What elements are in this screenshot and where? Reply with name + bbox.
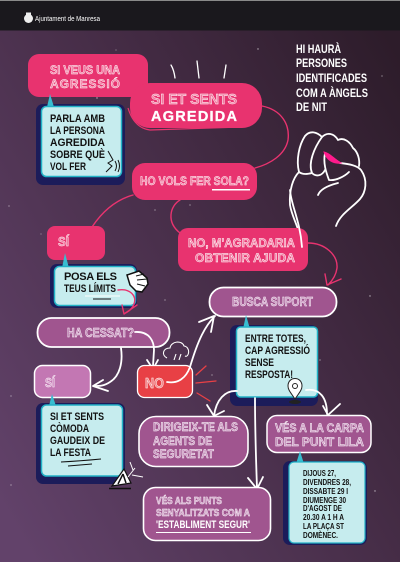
arrow: to dirigeix (207, 391, 237, 416)
arrow: no to busca suport (308, 243, 341, 285)
callout: dates punt lila: 20.30 A 1 H A (303, 513, 344, 522)
callout: parla amb la persona agredida: PARLA AMB (50, 113, 105, 125)
decorative rays around title (171, 61, 226, 78)
panel: ves als punts (144, 488, 270, 540)
text block: angels de nit: HI HAURÀ (296, 43, 341, 56)
panel: title si et sents agredida: AGREDIDA (151, 109, 238, 125)
callout: dates punt lila: DOMÈNEC. (303, 531, 338, 540)
callout: parla amb la persona agredida: SOBRE QUÈ (50, 148, 105, 161)
panel: si (lilac): SÍ (45, 375, 55, 390)
callout: si et sents comoda: GAUDEIX DE (50, 435, 105, 447)
panel: ves a la carpa (267, 416, 371, 452)
panel: title si et sents agredida (128, 83, 262, 130)
text block: angels de nit: IDENTIFICADES (296, 73, 367, 85)
arrow: ha cessat to no (135, 332, 158, 369)
callout: dates punt lila: DISSABTE 29 I (303, 487, 348, 496)
panel: no m'agradaria obtenir ajuda (178, 228, 308, 271)
panel: title si et sents agredida: SI ET SENTS (151, 92, 237, 108)
callout: dates punt lila: DIJOUS 27, (303, 469, 336, 478)
callout: parla amb la persona agredida: VOL FER (50, 161, 86, 173)
icon: party hat (109, 462, 143, 488)
panel: ves a la carpa: VÉS A LA CARPA (275, 420, 364, 435)
panel: no m'agradaria obtenir ajuda: NO, M'AGRADARIA (188, 236, 295, 250)
arrow: no to busca suport (190, 316, 215, 367)
panel: no m'agradaria obtenir ajuda: OBTENIR AJUDA (195, 251, 295, 265)
callout: posa els teus limits (50, 253, 137, 308)
panel: si veus una agressio: AGRESSIÓ (50, 76, 120, 91)
panel: ho vols fer sola (132, 163, 257, 200)
callout: entre totes: RESPOSTA! (245, 369, 293, 381)
callout: entre totes: CAP AGRESSIÓ (245, 344, 310, 357)
panel: dirigeix-te: SEGURETAT (153, 447, 215, 461)
panel: no (138, 366, 192, 398)
connector: question to yes (92, 195, 133, 227)
icon: alarm rays (196, 366, 216, 401)
callout: posa els teus limits: POSA ELS (64, 271, 117, 283)
connector: question to no (171, 200, 180, 233)
panel: dirigeix-te: AGENTS DE (153, 434, 212, 448)
callout: parla amb la persona agredida: AGREDIDA (50, 137, 105, 149)
callout: si et sents comoda: LA FESTA (50, 447, 91, 459)
panel: busca suport: BUSCA SUPORT (232, 295, 313, 309)
panel: no: NO (145, 375, 164, 392)
text block: angels de nit (296, 43, 368, 114)
callout: si et sents comoda: CÒMODA (50, 422, 89, 435)
text block: angels de nit: COM A ÀNGELS (296, 87, 368, 100)
header bar (0, 0, 400, 30)
logo: Ajuntament de Manresa: Ajuntament de Manresa (35, 16, 100, 23)
arrow: ha cessat to si (93, 348, 122, 391)
panel: si (lilac) (34, 366, 90, 398)
callout: dates punt lila: LA PLAÇA ST (303, 522, 344, 531)
callout: dates punt lila: DIVENDRES 28, (303, 478, 351, 487)
text block: angels de nit: PERSONES (296, 58, 347, 70)
callout: entre totes (230, 315, 318, 406)
connector: fist wrist lines (290, 190, 302, 247)
icon: storm cloud (163, 342, 189, 360)
callout: parla amb la persona agredida (36, 94, 125, 185)
arrow: to establiment segur (248, 398, 263, 489)
callout: dates punt lila: DIUMENGE 30 (303, 496, 346, 505)
arrow: to carpa (306, 390, 340, 415)
panel: ha cessat (38, 318, 170, 347)
callout: dates punt lila (283, 451, 367, 545)
panel: ves a la carpa: DEL PUNT LILA (275, 435, 364, 449)
panel: si (pink) (47, 226, 105, 260)
arrow: limits to ha cessat (118, 290, 137, 314)
icon: location pin (288, 378, 302, 404)
connector: title to question (255, 106, 288, 168)
panel: ves als punts: VÉS ALS PUNTS (156, 494, 222, 507)
panel: busca suport (210, 288, 336, 316)
callout: entre totes: SENSE (245, 357, 274, 369)
icon: speaking face (106, 151, 120, 172)
panel: ha cessat: HA CESSAT? (67, 326, 134, 340)
text block: angels de nit: DE NIT (296, 102, 327, 114)
icon: raised fist (290, 132, 365, 247)
callout: entre totes: ENTRE TOTES, (245, 333, 306, 345)
callout: si et sents comoda: SI ET SENTS (50, 411, 104, 423)
callout: parla amb la persona agredida: LA PERSONA (50, 125, 105, 137)
panel: si veus una agressio (28, 54, 148, 97)
icon: thumbs down hand (127, 271, 148, 292)
panel: dirigeix-te: DIRIGEIX-TE ALS (153, 420, 238, 434)
logo: Ajuntament de Manresa (24, 12, 100, 23)
callout: posa els teus limits: TEUS LÍMITS (64, 282, 116, 295)
callout: dates punt lila: D'AGOST DE (303, 504, 343, 513)
panel: ves als punts: SENYALITZATS COM A (156, 507, 250, 519)
panel: si veus una agressio: SI VEUS UNA (50, 63, 120, 77)
callout: si et sents comoda (36, 394, 125, 484)
panel: ves als punts: 'ESTABLIMENT SEGUR' (156, 519, 250, 531)
panel: ho vols fer sola: HO VOLS FER SOLA? (140, 174, 249, 188)
panel: si (pink): SÍ (58, 234, 69, 249)
panel: dirigeix-te (139, 416, 248, 466)
